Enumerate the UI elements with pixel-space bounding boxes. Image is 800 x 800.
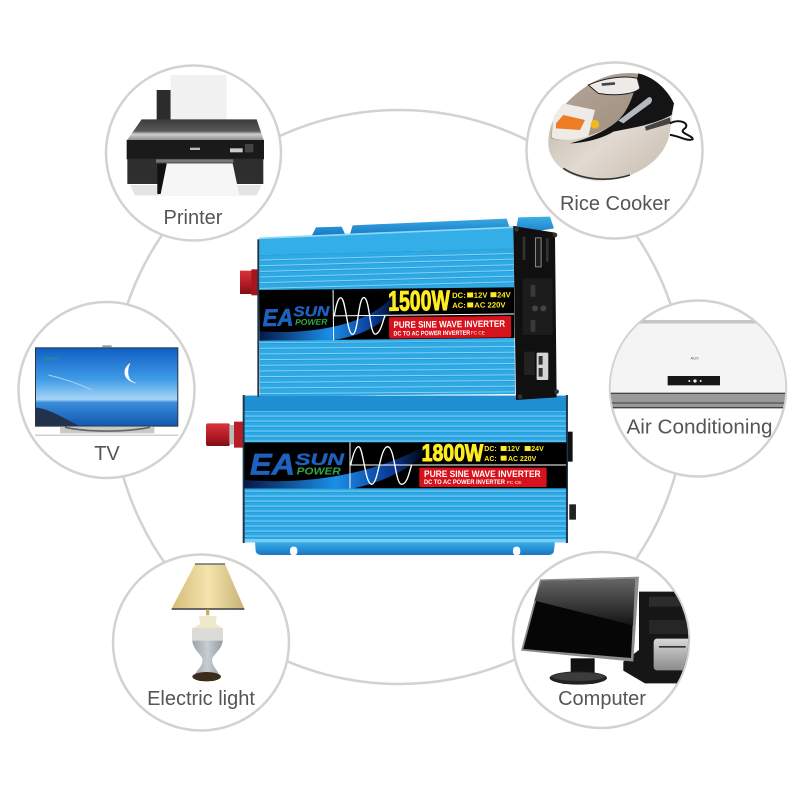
bottom flange (255, 542, 555, 555)
panel: electric light (113, 554, 289, 730)
label: Electric light: Electric light (147, 688, 255, 710)
icon: air conditioner (610, 320, 787, 408)
panel: TV (18, 302, 194, 478)
icon: table lamp (172, 564, 244, 681)
inverter: 1500W (rear unit) (240, 217, 559, 400)
label band (259, 284, 515, 341)
voltage specs: AC 220V (474, 300, 506, 310)
icon: printer (127, 75, 264, 195)
casing (253, 227, 521, 398)
panel: printer (106, 66, 281, 240)
voltage specs: DC: (452, 291, 466, 300)
wattage: 1500W: 1500W (388, 285, 450, 317)
inverter: 1800W (front unit) (206, 395, 576, 555)
label: Computer: Computer (558, 688, 646, 710)
sine wave graphic (333, 288, 514, 341)
logo: EASUN POWER: POWER (295, 317, 327, 327)
icon: TV (35, 345, 178, 436)
voltage specs: 12V (507, 446, 520, 453)
red banner: PURE SINE WAVE INVERTER (424, 469, 541, 479)
logo: EASUN POWER: POWER (297, 466, 342, 477)
panel: air conditioning (610, 300, 787, 476)
voltage specs: AC 220V (508, 456, 537, 463)
logo: EASUN POWER: EA (250, 448, 295, 481)
red banner: FC CE (471, 330, 485, 335)
terminal: red knob (240, 269, 259, 295)
wattage: 1800W: 1800W (422, 440, 484, 467)
voltage specs: DC: (484, 446, 497, 453)
red banner: DC TO AC POWER INVERTER (393, 330, 471, 338)
label band (244, 440, 567, 488)
voltage specs: AC: (484, 456, 497, 463)
voltage specs: 24V (531, 446, 544, 453)
red banner (389, 316, 511, 339)
icon: computer (521, 577, 692, 685)
logo: EASUN POWER: SUN (295, 450, 345, 469)
voltage specs (484, 446, 544, 463)
logo: EASUN POWER: SUN (293, 303, 330, 319)
label: TV: TV (94, 443, 120, 465)
panel: rice cooker (526, 62, 702, 238)
casing (243, 395, 568, 543)
terminal: red knob (206, 422, 245, 448)
sine wave graphic (350, 442, 566, 488)
voltage specs: 12V (474, 291, 488, 300)
voltage specs (452, 290, 512, 310)
label: Printer: Printer (164, 207, 223, 229)
icon: air conditioner: AUX (691, 355, 699, 360)
logo: EASUN POWER: EA (263, 305, 294, 332)
label: Air Conditioning: Air Conditioning (626, 416, 772, 438)
red banner: DC TO AC POWER INVERTER (424, 480, 506, 486)
large connecting ring (112, 110, 686, 684)
icon: TV: Hisense (44, 356, 58, 360)
logo: EASUN POWER (263, 303, 331, 332)
voltage specs: AC: (452, 301, 466, 310)
panel: computer (513, 552, 692, 728)
end panel with sockets (513, 226, 559, 400)
top flange (312, 217, 554, 236)
label: Rice Cooker: Rice Cooker (560, 193, 670, 215)
red banner (419, 468, 547, 487)
logo: EASUN POWER (250, 448, 345, 481)
red banner: FC CE (507, 480, 522, 486)
switch and side detail (567, 432, 573, 462)
voltage specs: 24V (497, 290, 512, 299)
icon: rice cooker (548, 73, 693, 181)
red banner: PURE SINE WAVE INVERTER (393, 319, 505, 330)
